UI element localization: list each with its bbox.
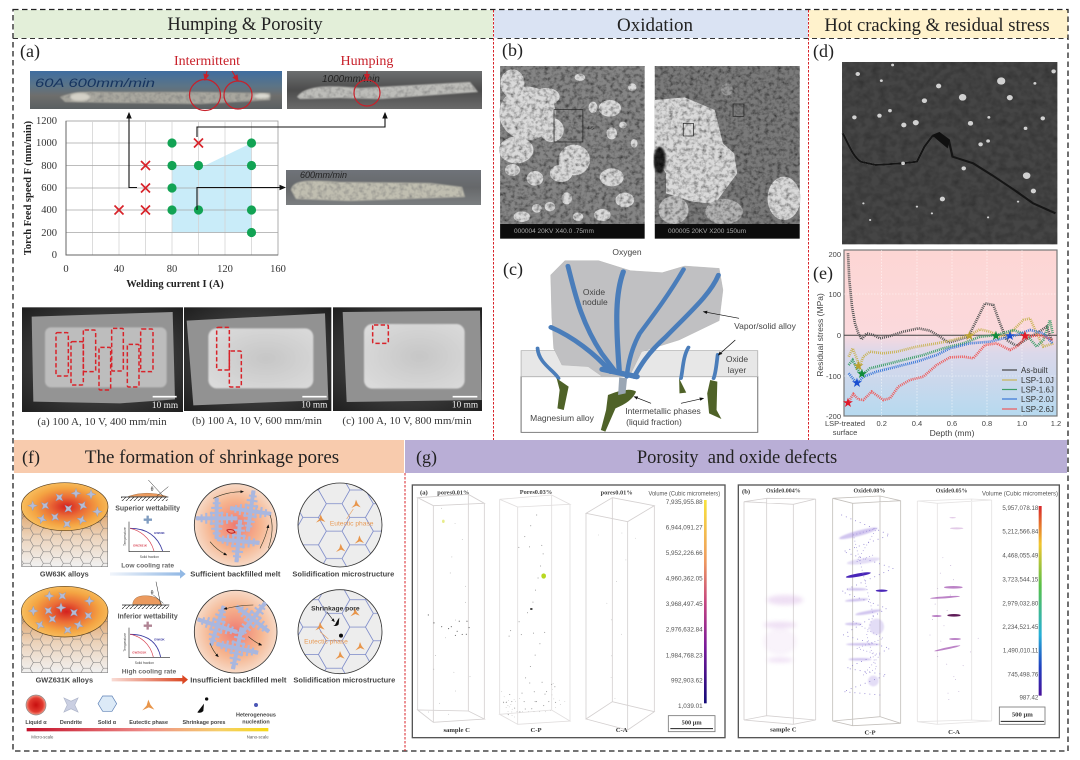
x tick labels: 0.2 xyxy=(876,419,887,428)
x tick labels xyxy=(825,419,1061,437)
image: macro specimens with porosity markers: 10 mm xyxy=(301,400,328,410)
photo: intermittent weld bead: 60A 600mm/min xyxy=(35,76,155,90)
x tick labels: surface xyxy=(833,428,857,437)
curves xyxy=(848,253,1053,403)
label: Humping: Humping xyxy=(341,54,393,69)
sample labels: C-P xyxy=(864,730,876,737)
label: GWZ631K alloys xyxy=(36,675,93,684)
panel: oxidation content xyxy=(499,40,800,432)
x axis title: Welding current I (A) xyxy=(126,279,224,290)
sample labels: sample C xyxy=(443,727,470,734)
diagram: oxide nodule growth xyxy=(521,261,758,432)
cooling curve chart xyxy=(123,522,170,559)
sample labels: C-A xyxy=(948,729,960,736)
image: SEM micrographs: 4-5 xyxy=(587,126,594,130)
SEM scale captions xyxy=(514,228,746,235)
colour bar: Volume (Cubic micrometers) xyxy=(982,491,1058,498)
SEM scale captions: 000005 20KV X200 150um xyxy=(668,228,746,235)
panel: porosity volumes (a) xyxy=(412,485,725,738)
chart: residual stress vs depth xyxy=(815,250,1061,438)
x tick labels: 1.2 xyxy=(1051,419,1061,428)
panel label (e): (e) xyxy=(813,263,833,284)
label: Intermittent: Intermittent xyxy=(174,54,240,69)
sample labels: sample C xyxy=(770,727,797,734)
colour bar: 1,984,768.23 xyxy=(666,652,703,659)
specimen captions: (c) 100 A, 10 V, 800 mm/min xyxy=(342,415,472,427)
panel label (a): (a) xyxy=(20,41,40,62)
x axis title: Depth (mm) xyxy=(930,428,975,438)
label: GW63K alloys xyxy=(40,569,89,578)
photo: intermittent weld bead xyxy=(30,71,282,109)
sample labels xyxy=(770,727,960,737)
panel: oxide volumes (b): (b) xyxy=(742,489,750,496)
oxide layer xyxy=(521,351,758,377)
process window shaded area xyxy=(172,143,252,232)
panel: oxide volumes (b) xyxy=(738,485,1059,738)
diagram labels: Oxygen xyxy=(612,247,642,257)
sufficient backfill circle xyxy=(194,484,277,566)
colour bar: 1,490,010.11 xyxy=(1003,648,1039,655)
x tick labels: 1.0 xyxy=(1017,419,1027,428)
legend: Liquid α xyxy=(25,720,47,726)
arrow xyxy=(112,675,188,684)
cooling curve chart: Solid fraction xyxy=(140,555,159,559)
photo: continuous weld bead xyxy=(286,170,481,205)
porosity headings: pores0.01% xyxy=(601,489,633,496)
legend: LSP-1.0J xyxy=(1021,376,1054,385)
colour bar: 1,039.01 xyxy=(678,703,703,710)
cooling curve chart: Temperature xyxy=(123,527,127,546)
photo: continuous weld bead: 600mm/min xyxy=(300,170,347,180)
scale bar: 500 µm xyxy=(1012,711,1033,718)
wettability icon xyxy=(122,582,169,609)
melt pool and hexagonal grains xyxy=(21,586,108,673)
microstructure circle with pores: Shrinkage pore xyxy=(311,605,360,612)
colour bar: 5,957,078.18 xyxy=(1002,505,1039,512)
scale bar xyxy=(668,716,715,732)
image: macro specimens with porosity markers: 10 mm xyxy=(452,400,479,410)
star markers: ★ xyxy=(1004,328,1016,343)
arrow xyxy=(110,569,186,579)
green points xyxy=(167,138,256,237)
row: GWZ631K alloy xyxy=(21,582,395,684)
x axis ticks: 80 xyxy=(167,264,177,275)
legend: LSP-2.0J xyxy=(1021,395,1054,404)
colour bar: 4,960,362.05 xyxy=(666,575,703,582)
3D boxes xyxy=(418,494,654,730)
vapor channels xyxy=(538,266,718,378)
panel header: The formation of shrinkage pores: The formation of shrinkage pores xyxy=(85,447,339,468)
panel header: Porosity and oxide defects: Porosity and oxide defects xyxy=(637,448,837,468)
star markers: ★ xyxy=(1019,328,1031,343)
legend: Solid α xyxy=(98,720,117,726)
wettability icon: θ xyxy=(151,590,154,596)
label: Low cooling rate xyxy=(121,563,174,570)
x axis ticks: 0 xyxy=(63,264,69,275)
y tick labels: -100 xyxy=(826,372,841,381)
panel header: Porosity and oxide defects: (g) xyxy=(416,447,437,468)
y tick labels: 100 xyxy=(828,290,841,299)
panel header: Hot cracking & residual stress xyxy=(809,10,1068,38)
cooling curve chart: GWZ631K xyxy=(133,544,148,548)
annotation: intermittent circles xyxy=(190,71,252,110)
microstructure circle xyxy=(298,483,382,567)
cooling curve chart: GWZ631K xyxy=(132,650,147,654)
colour bar: 2,976,632.84 xyxy=(666,627,703,634)
panel header: Oxidation xyxy=(494,10,808,38)
panel: hot cracking and residual stress content xyxy=(813,41,1061,438)
legend: Heterogeneous xyxy=(236,713,276,719)
porosity headings xyxy=(437,489,633,496)
label: Superior wettability xyxy=(115,506,180,513)
cooling curve chart: GW63K xyxy=(154,531,165,535)
insufficient backfill circle xyxy=(191,590,282,674)
x axis ticks: 40 xyxy=(114,264,124,275)
y axis title: Residual stress (MPa) xyxy=(815,293,825,377)
microstructure circle: Eutectic phase xyxy=(330,520,374,527)
microstructure circle with pores xyxy=(298,590,382,674)
x tick labels: 0.8 xyxy=(982,419,992,428)
pore scatter xyxy=(425,508,638,718)
panel header: Humping & Porosity xyxy=(14,10,493,38)
y axis ticks: 800 xyxy=(41,161,57,172)
panel: porosity volumes (a): (a) xyxy=(420,489,428,496)
y axis title: Torch Feed speed F (mm/min) xyxy=(23,120,34,255)
colour bar: 7,935,955.88 xyxy=(666,499,703,506)
y axis ticks xyxy=(36,116,57,261)
zero line xyxy=(844,334,1057,336)
cooling curve chart xyxy=(123,628,170,665)
colour bar: 6,944,091.27 xyxy=(666,524,703,531)
melt pool and hexagonal grains xyxy=(21,483,108,567)
oxide headings xyxy=(766,489,968,495)
x axis ticks: 120 xyxy=(217,264,233,275)
colour bar xyxy=(982,491,1058,701)
legend: Shrinkage pores xyxy=(183,720,225,726)
label: Solidification microstructure xyxy=(293,675,395,684)
panel: formation of shrinkage pores content xyxy=(21,480,395,740)
row: GW63K alloy xyxy=(21,480,394,579)
y tick labels: -200 xyxy=(826,412,841,421)
legend: Dendrite xyxy=(60,720,82,726)
oxide bands: sample C xyxy=(763,595,803,662)
leader arrows xyxy=(634,312,739,403)
diagram labels xyxy=(530,247,797,427)
colour bar: 2,979,032.80 xyxy=(1002,600,1039,607)
oxide nodule xyxy=(551,261,723,377)
legend xyxy=(25,691,276,740)
y axis ticks: 600 xyxy=(41,183,57,194)
y tick labels: 0 xyxy=(837,331,841,340)
diagram labels: Intermetallic phases xyxy=(625,406,701,416)
diagram labels: Magnesium alloy xyxy=(530,413,595,423)
y axis ticks: 400 xyxy=(41,205,57,216)
legend: LSP-2.6J xyxy=(1021,405,1054,414)
colour bar: 5,952,226.66 xyxy=(666,550,703,557)
plus sign xyxy=(144,622,152,630)
x axis ticks xyxy=(63,264,286,275)
sample labels xyxy=(443,727,628,734)
y tick labels: 200 xyxy=(828,250,841,259)
plot background xyxy=(844,250,1057,416)
specimen captions: (b) 100 A, 10 V, 600 mm/min xyxy=(192,415,322,427)
oxide bands: C-A xyxy=(930,517,980,702)
legend xyxy=(1002,366,1054,414)
cooling curve chart: Solid fraction xyxy=(135,661,154,665)
label: Solidification microstructure xyxy=(292,569,394,578)
porosity headings: pores0.01% xyxy=(437,489,469,496)
colour bar xyxy=(648,490,720,710)
diagram labels: Oxide xyxy=(726,354,748,364)
sample labels: C-A xyxy=(616,727,628,734)
x axis ticks: 160 xyxy=(270,264,286,275)
sample labels: C-P xyxy=(530,727,542,734)
label: High cooling rate xyxy=(122,669,176,676)
y axis ticks: 1000 xyxy=(36,138,57,149)
y axis ticks: 0 xyxy=(52,250,57,261)
image: macro specimens with porosity markers xyxy=(22,307,482,412)
colour bar: 987.42 xyxy=(1019,694,1039,701)
panel header: The formation of shrinkage pores xyxy=(14,440,404,473)
label: Sufficient backfilled melt xyxy=(190,569,281,578)
diagram labels: layer xyxy=(728,365,746,375)
panel header: The formation of shrinkage pores: (f) xyxy=(22,447,40,468)
star markers: ★ xyxy=(856,366,868,381)
diagram labels: (liquid fraction) xyxy=(626,417,682,427)
red cross points xyxy=(114,138,203,214)
x tick labels: 0.6 xyxy=(947,419,957,428)
colour bar: 3,723,544.15 xyxy=(1002,576,1039,583)
specimen captions: (a) 100 A, 10 V, 400 mm/min xyxy=(37,416,167,428)
diagram labels: Vapor/solid alloy xyxy=(734,321,797,331)
panel header: Humping & Porosity: Humping & Porosity xyxy=(167,15,323,35)
chart: process window xyxy=(23,116,286,290)
plus sign xyxy=(144,516,152,524)
legend: As-built xyxy=(1021,366,1048,375)
cooling curve chart: Temperature xyxy=(123,633,127,652)
intermetallic phases xyxy=(557,378,721,432)
star markers: ★ xyxy=(842,395,854,410)
x tick labels: 0.4 xyxy=(912,419,922,428)
substrate xyxy=(521,377,758,432)
wettability icon xyxy=(121,480,168,501)
oxide headings: Oxide0.004% xyxy=(766,489,801,495)
diagram labels: Oxide xyxy=(583,287,605,297)
star markers: ★ xyxy=(990,328,1002,343)
scale bar: 500 µm xyxy=(682,719,702,726)
panel header: Hot cracking & residual stress: Hot cracking & residual stress xyxy=(824,15,1050,36)
star markers: ★ xyxy=(851,375,863,390)
colour bar: 5,212,566.84 xyxy=(1002,529,1039,536)
legend: Eutectic phase xyxy=(129,720,168,726)
panel header: Oxidation: Oxidation xyxy=(617,15,693,36)
legend: LSP-1.6J xyxy=(1021,386,1054,394)
colour bar: 745,498.76 xyxy=(1008,671,1039,678)
panel label (b): (b) xyxy=(502,40,523,61)
star markers: ★ xyxy=(964,328,975,343)
image: crack micrograph xyxy=(842,62,1057,244)
colour bar: 3,968,497.45 xyxy=(666,601,703,608)
panel: humping and porosity content xyxy=(20,41,482,428)
image: SEM micrographs xyxy=(499,66,800,239)
colour bar: Volume (Cubic micrometers) xyxy=(648,490,720,497)
panel label (c): (c) xyxy=(503,259,523,280)
colour bar: 2,234,521.45 xyxy=(1002,624,1039,631)
legend: Nano-scale xyxy=(247,735,269,740)
colour bar: 992,903.62 xyxy=(671,677,703,684)
oxide bands: C-P xyxy=(838,515,893,695)
scale bar xyxy=(999,707,1045,724)
star markers xyxy=(842,328,1031,410)
oxide headings: Oxide0.08% xyxy=(853,489,885,495)
cooling curve chart: GW63K xyxy=(154,637,165,641)
photo: humping weld bead xyxy=(287,71,482,109)
x tick labels: LSP-treated xyxy=(825,419,865,428)
specimen captions xyxy=(37,415,472,428)
microstructure circle with pores: Eutectic phase xyxy=(304,639,348,646)
colour bar: 4,468,055.49 xyxy=(1002,552,1039,559)
label: Insufficient backfilled melt xyxy=(190,675,287,684)
arrows linking chart to photos xyxy=(129,113,385,210)
photo: humping weld bead: 1000mm/min xyxy=(322,74,380,85)
panel header: Porosity and oxide defects xyxy=(405,440,1067,473)
panel label (d): (d) xyxy=(813,41,834,62)
porosity headings: Pores0.03% xyxy=(520,489,552,496)
label: Inferior wettability xyxy=(118,613,178,620)
oxide headings: Oxide0.05% xyxy=(936,489,968,495)
SEM scale captions: 000004 20KV X40.0 .75mm xyxy=(514,228,594,235)
image: macro specimens with porosity markers: 10 mm xyxy=(152,401,179,411)
legend: Micro-scale xyxy=(31,735,54,740)
y axis ticks: 200 xyxy=(41,228,57,239)
legend: nucleation xyxy=(242,720,270,726)
y axis ticks: 1200 xyxy=(36,116,57,127)
wettability icon: θ xyxy=(151,487,154,493)
star markers: ★ xyxy=(853,358,864,373)
3D boxes xyxy=(744,496,992,726)
annotation: humping circle xyxy=(354,71,380,106)
y tick labels xyxy=(826,250,841,421)
diagram labels: nodule xyxy=(582,297,608,307)
